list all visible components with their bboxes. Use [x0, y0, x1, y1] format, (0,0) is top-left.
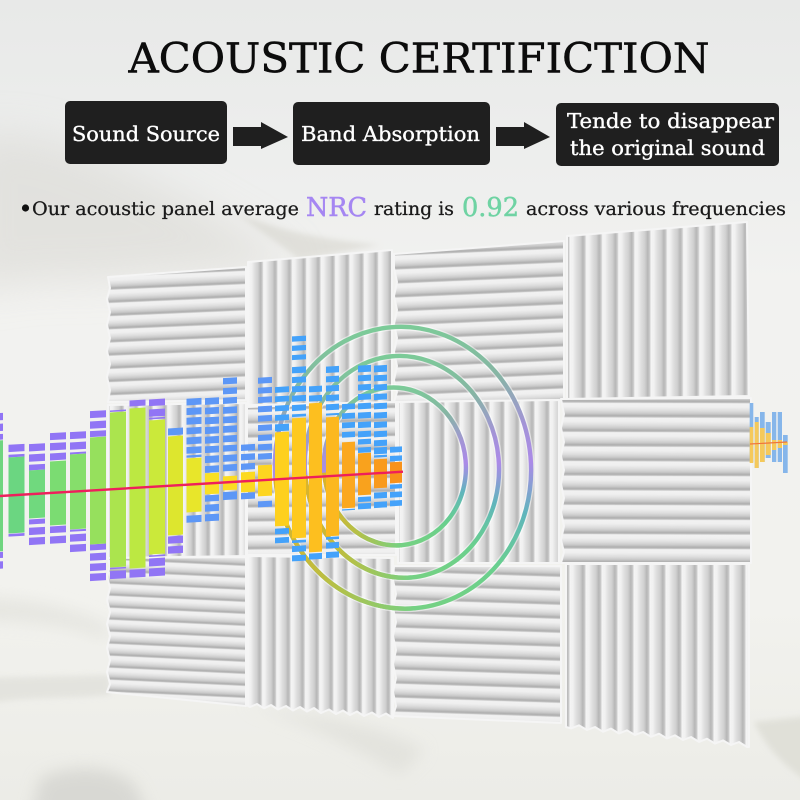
panel 2: vertical wedges: [248, 250, 392, 405]
acoustic panel wall: [107, 222, 751, 747]
flow step: result: Tende to disappear: [567, 109, 774, 133]
small waveform passing through the panel: [750, 403, 788, 473]
yellow and blue bars: [168, 377, 272, 554]
panel 7: vertical wedges: [398, 400, 559, 563]
panel 3: horizontal wedges: [394, 241, 564, 402]
NRC rating statement: 0.92: [462, 193, 519, 223]
middle arc: [296, 348, 508, 586]
NRC rating statement: Our acoustic panel average: [32, 199, 299, 220]
green and purple bars: [0, 399, 165, 581]
NRC rating statement: [22, 193, 786, 223]
panel 6: horizontal wedges: [247, 402, 396, 555]
panel 9: horizontal wedges: [107, 557, 246, 706]
red center line: [0, 472, 403, 496]
NRC rating statement: rating is: [374, 199, 454, 220]
orange and blue bars: [275, 336, 402, 561]
title: ACOUSTIC CERTIFICTION: [127, 34, 709, 82]
flow step: sound source: Sound Source: [72, 122, 220, 146]
panel 5: vertical wedges: [108, 403, 246, 558]
arrow: absorption to result: [496, 122, 550, 149]
sound wave arcs: [263, 316, 543, 619]
flow step: result: [556, 103, 779, 166]
panel 10: vertical wedges: [248, 556, 393, 718]
panel 4: vertical wedges: [567, 222, 749, 399]
outer arc: [263, 316, 543, 619]
panel 1: horizontal wedges: [107, 267, 246, 402]
panel 12: vertical wedges: [566, 564, 749, 747]
panel 11: horizontal wedges: [393, 566, 561, 723]
flow step: band absorption: Band Absorption: [301, 122, 480, 146]
flow step: band absorption: [293, 102, 490, 165]
NRC rating statement: NRC: [306, 193, 367, 223]
flow step: sound source: [65, 101, 227, 164]
small waveform line: [750, 442, 787, 444]
main sound waveform equalizer bars: [0, 336, 403, 581]
inner arc: [317, 382, 472, 551]
flow step: result: the original sound: [570, 136, 765, 160]
panel 8: horizontal wedges: [561, 398, 751, 563]
NRC rating statement: across various frequencies: [526, 199, 786, 220]
arrow: source to absorption: [233, 122, 288, 149]
